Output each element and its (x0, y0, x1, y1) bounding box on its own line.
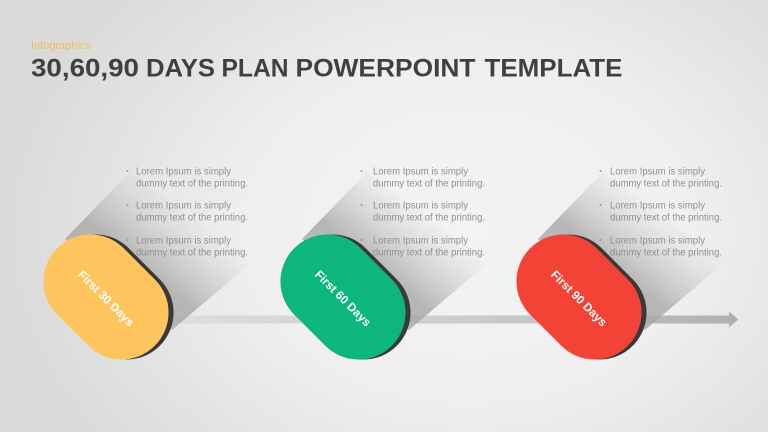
title: DAYS (146, 54, 215, 82)
text block: first 30 days: dummy text of the printing. (136, 248, 248, 258)
title: PLAN (222, 54, 288, 82)
text block: first 60 days: Lorem Ipsum is simply (373, 200, 468, 212)
title: TEMPLATE (484, 54, 622, 82)
pill: first 60 days (261, 215, 425, 379)
panel: first 90 days (497, 166, 725, 379)
text block: first 60 days: dummy text of the printing. (373, 212, 485, 224)
text block: first 90 days: dummy text of the printing. (610, 248, 722, 258)
pill: first 30 days (24, 215, 188, 379)
title: POWERPOINT (296, 54, 476, 82)
text block: first 30 days: Lorem Ipsum is simply (136, 200, 231, 212)
text block: first 60 days: dummy text of the printing. (373, 178, 485, 190)
text block: first 90 days: dummy text of the printing. (610, 178, 722, 190)
pill edge: first 90 days (502, 215, 666, 379)
pill label: first 60 days: First 60 Days (312, 267, 374, 330)
title: 30,60,90 (31, 54, 139, 82)
text block: first 30 days (126, 166, 248, 258)
text block: first 60 days: Lorem Ipsum is simply (373, 236, 468, 246)
pill label: first 30 days: First 30 Days (75, 267, 137, 330)
text block: first 30 days: Lorem Ipsum is simply (136, 166, 231, 178)
text block: first 90 days (600, 166, 722, 258)
shadow: first 30 days (65, 172, 252, 330)
shadow: first 90 days (538, 172, 725, 330)
timeline arrow (170, 312, 738, 328)
text block: first 90 days: Lorem Ipsum is simply (610, 236, 705, 246)
text block: first 30 days: Lorem Ipsum is simply (136, 236, 231, 246)
panel: first 30 days (24, 166, 252, 379)
text block: first 60 days: dummy text of the printing. (373, 248, 485, 258)
text block: first 90 days: Lorem Ipsum is simply (610, 200, 705, 212)
pill: first 90 days (497, 215, 661, 379)
pill label: first 90 days: First 90 Days (548, 267, 610, 330)
shadow: first 60 days (302, 172, 489, 330)
text block: first 60 days (360, 166, 485, 258)
text block: first 90 days: Lorem Ipsum is simply (610, 166, 705, 178)
text block: first 60 days: Lorem Ipsum is simply (373, 166, 468, 178)
pill edge: first 60 days (266, 215, 430, 379)
text block: first 30 days: dummy text of the printing. (136, 212, 248, 224)
text block: first 30 days: dummy text of the printing. (136, 178, 248, 190)
title (31, 54, 622, 82)
text block: first 90 days: dummy text of the printing. (610, 212, 722, 224)
pill edge: first 30 days (29, 215, 193, 379)
panel: first 60 days (261, 166, 489, 379)
eyebrow label: Infographics (31, 40, 91, 52)
